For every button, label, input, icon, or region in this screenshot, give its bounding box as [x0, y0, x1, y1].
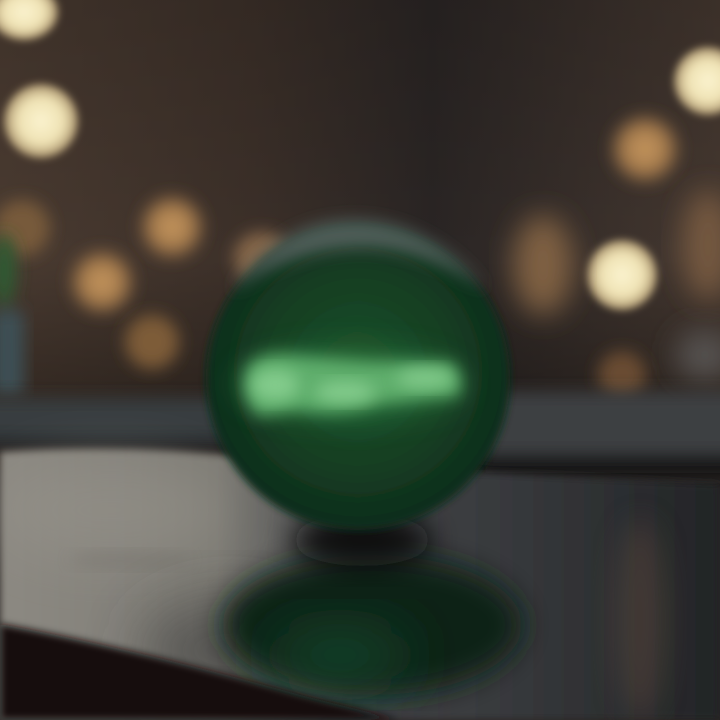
green ball: [206, 220, 510, 530]
ball top highlight: [232, 220, 486, 292]
table surface: [0, 449, 720, 720]
ball reflection: [222, 555, 522, 695]
left edge object: [0, 234, 24, 395]
bokeh lights: [0, 0, 720, 399]
right edge object: [675, 329, 720, 381]
background counter band: [0, 392, 720, 478]
ball contact shadow: [292, 514, 432, 566]
background wall: [0, 0, 720, 470]
ball logo glow: [235, 346, 465, 422]
foreground table edge: [0, 624, 400, 720]
